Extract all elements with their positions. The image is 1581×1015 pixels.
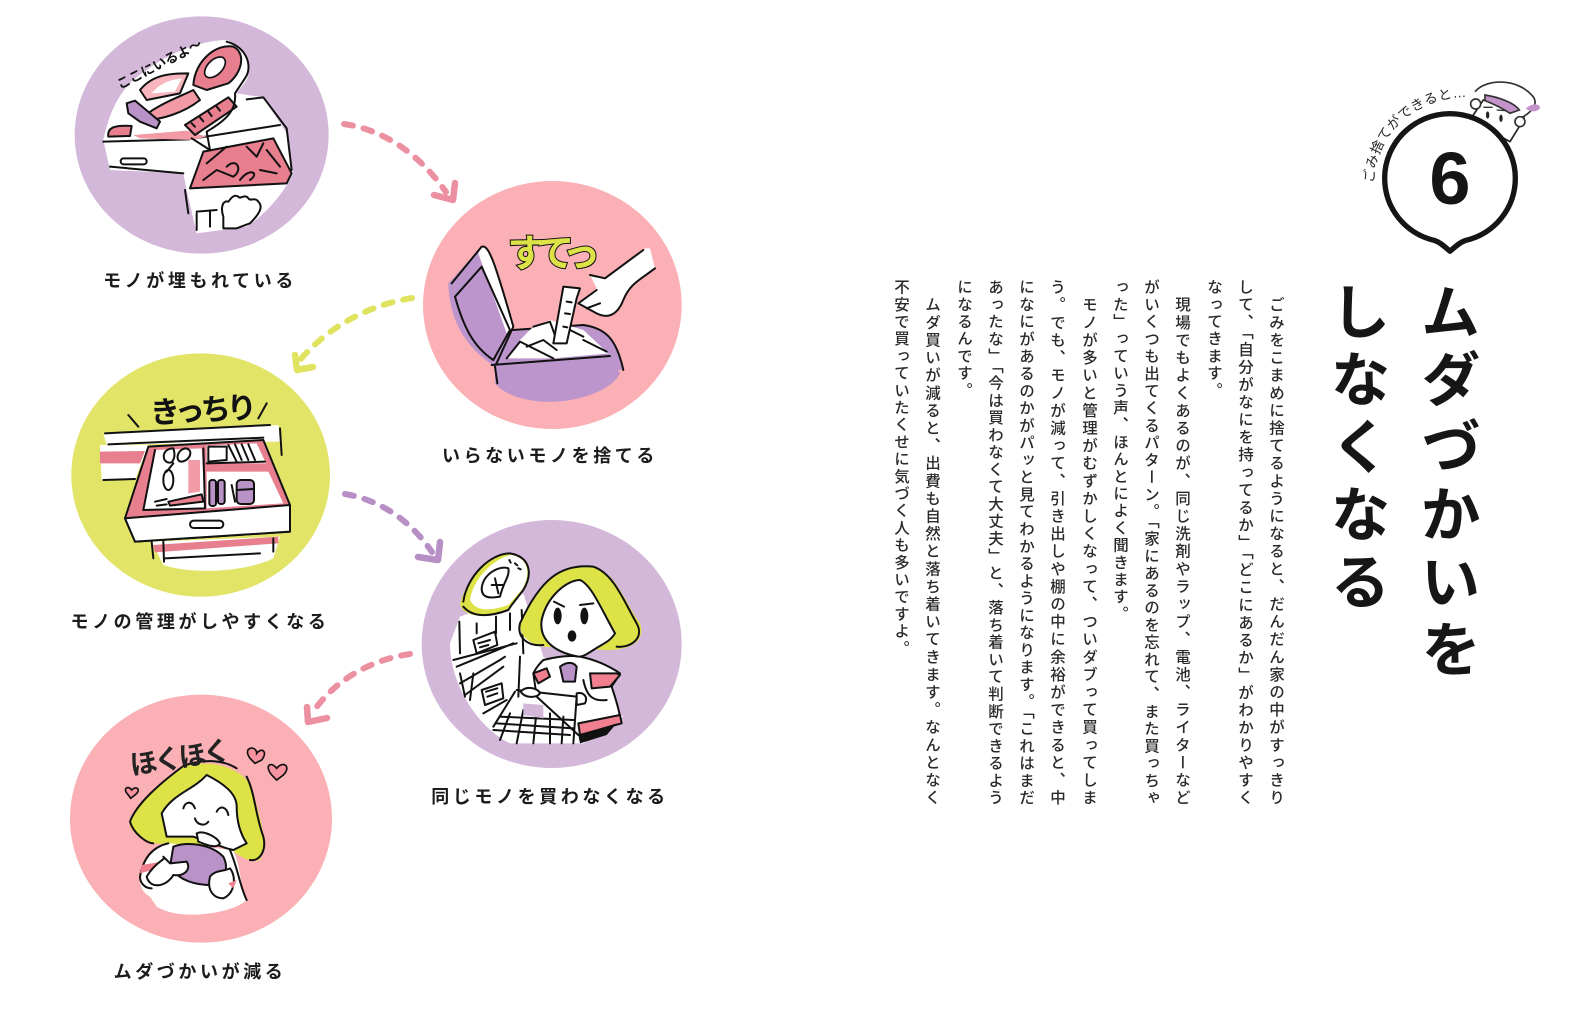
title xyxy=(1322,281,1480,686)
arrow: pink dashed down left xyxy=(304,651,413,726)
illustration: woman hugging wallet xyxy=(70,694,332,943)
panel: throw away unneeded things xyxy=(423,181,682,466)
paragraph columns: あったな」「今は買わなくて大丈夫」と、落ち着いて判断できるよう xyxy=(986,279,1003,805)
paragraph columns: 現場でもよくあるのが、同じ洗剤やラップ、電池、ライターなど xyxy=(1173,297,1190,805)
arrow: pink dashed down right xyxy=(341,121,458,204)
label: ムダづかいが減る xyxy=(114,962,286,982)
illustration: woman with shopping cart xyxy=(422,520,682,768)
paragraph columns xyxy=(892,279,1284,805)
badge: number 6 xyxy=(1363,81,1540,254)
speech-bubble circle xyxy=(1385,114,1515,251)
title: しなくなる xyxy=(1322,281,1389,618)
panel: stop buying duplicates xyxy=(422,520,682,807)
label: モノの管理がしやすくなる xyxy=(70,612,330,632)
arrow: yellow dashed down left xyxy=(292,295,415,374)
paragraph columns: 不安で買っていたくせに気づく人も多いですよ。 xyxy=(892,279,909,657)
illustration: tidy drawer xyxy=(71,353,330,597)
badge: number 6: ごみ捨てができると… xyxy=(1363,90,1465,181)
panel: wasteful spending decreases xyxy=(70,694,332,982)
arrow: purple dashed down right xyxy=(342,491,444,564)
paragraph columns: ごみをこまめに捨てるようになると、だんだん家の中がすっきり xyxy=(1267,297,1284,805)
illustration: cluttered drawer with scissors xyxy=(74,16,329,254)
sound text: きっちり xyxy=(149,392,254,430)
panel: things are buried xyxy=(74,16,329,291)
title: ムダづかいを xyxy=(1412,281,1479,686)
curved caption xyxy=(1374,97,1468,183)
hearts xyxy=(125,748,287,798)
paragraph columns: ムダ買いが減ると、出費も自然と落ち着いてきます。なんとなく xyxy=(923,297,940,805)
paragraph columns: になにがあるのかがパッと見てわかるようになります。「これはまだ xyxy=(1017,279,1034,805)
paragraph columns: った」っていう声、ほんとによく聞きます。 xyxy=(1111,279,1128,623)
panel: easier to manage xyxy=(70,353,330,632)
paragraph columns: になるんです。 xyxy=(955,279,972,399)
illustration: trash bin and hand xyxy=(423,181,682,429)
label: いらないモノを捨てる xyxy=(442,446,658,466)
label: モノが埋もれている xyxy=(103,271,297,291)
speech text: ここにいるよ〜 xyxy=(115,36,204,92)
sound text: ほくほく xyxy=(128,735,230,781)
sound text: すてっ xyxy=(507,233,596,276)
paragraph columns: う。でも、モノが減って、引き出しや棚の中に余裕ができると、中 xyxy=(1048,279,1065,805)
paragraph columns: がいくつも出てくるパターン。「家にあるのを忘れて、また買っちゃ xyxy=(1142,279,1159,805)
icon: peeking character xyxy=(1470,82,1540,142)
paragraph columns: して、「自分がなにを持ってるか」「どこにあるか」がわかりやすく xyxy=(1236,279,1253,805)
body text xyxy=(892,279,1284,805)
paragraph columns: モノが多いと管理がむずかしくなって、ついダブって買ってしま xyxy=(1080,297,1097,805)
number: 6 xyxy=(1429,137,1471,220)
paragraph columns: なってきます。 xyxy=(1205,279,1222,399)
label: 同じモノを買わなくなる xyxy=(431,787,669,807)
